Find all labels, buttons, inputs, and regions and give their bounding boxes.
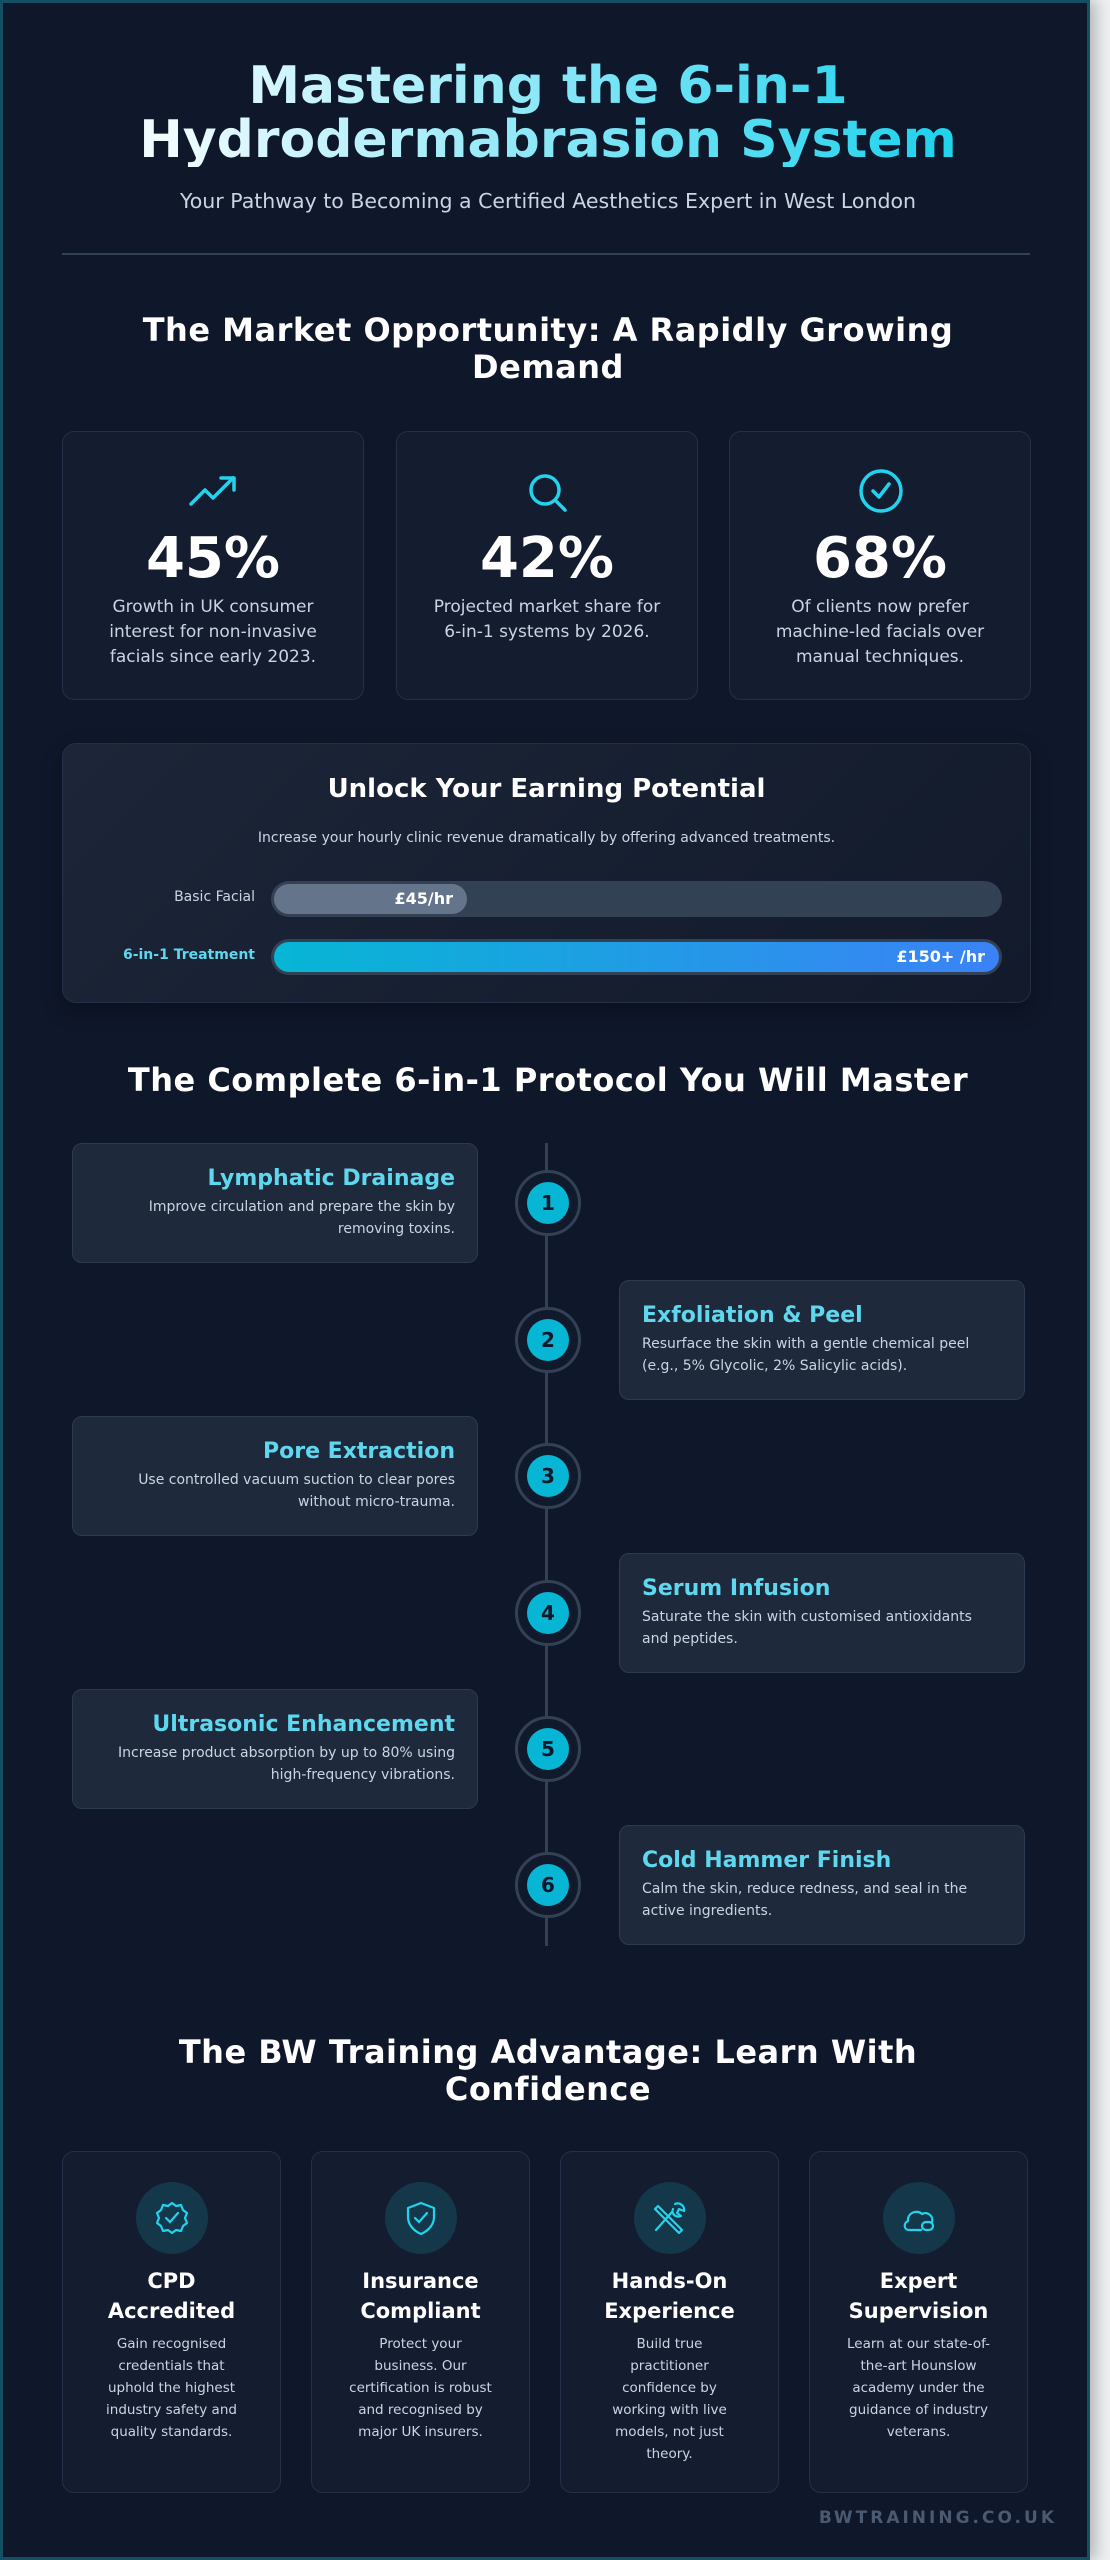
card: insurance: Compliant [360,2299,481,2323]
step 6 node: 6 [541,1873,555,1897]
title: Hydrodermabrasion System [139,110,957,170]
card: CPD: uphold the highest [108,2380,235,2396]
step 1 node [515,1170,581,1236]
step 1 card [72,1143,478,1263]
title [3,59,1093,167]
card: insurance: major UK insurers. [358,2424,483,2440]
bar: 6-in-1 treatment: £150+ /hr [896,947,985,966]
title: Mastering the 6-in-1 [248,56,848,116]
icon: badge [136,2182,208,2254]
card: CPD: Accredited [108,2299,235,2323]
card: supervision: guidance of industry [849,2402,988,2418]
panel: stat 42% [396,431,698,700]
step 4 card [619,1553,1025,1673]
card: insurance: business. Our [374,2358,467,2374]
step 5 node: 5 [541,1737,555,1761]
card: supervision: the-art Hounslow [860,2358,977,2374]
card: CPD: industry safety and [106,2402,237,2418]
step 4 card: Serum Infusion [642,1576,830,1601]
number: 42% [480,526,614,591]
step 6 card [619,1825,1025,1945]
card: insurance: and recognised by [358,2402,483,2418]
heading: Unlock Your Earning Potential [328,774,765,804]
number: 45% [146,526,280,591]
step 5 card [72,1689,478,1809]
card: supervision: veterans. [887,2424,950,2440]
card: hands-on: Build true [637,2336,702,2352]
footer: BWTRAINING.CO.UK [819,2508,1057,2528]
card: CPD: quality standards. [111,2424,232,2440]
bar: 6-in-1 treatment: 6-in-1 Treatment [123,947,255,963]
step 6 card: Calm the skin, reduce redness, and seal in the active ingredients. [642,1881,967,1919]
step 5 node [515,1716,581,1782]
card: insurance: certification is robust [349,2380,492,2396]
step 6 node [515,1852,581,1918]
icon: shield [385,2182,457,2254]
bar: basic facial: £45/hr [394,889,453,908]
heading: market opportunity [142,311,953,386]
step 2 card: Exfoliation & Peel [642,1303,863,1328]
number: 68% [813,526,947,591]
card: hands-on: practitioner [630,2358,709,2374]
panel: earning potential [62,743,1031,1003]
heading: BW advantage [179,2033,917,2108]
step 4 card: Saturate the skin with customised antioxidants and peptides. [642,1609,972,1647]
step 3 card: Use controlled vacuum suction to clear pores without micro-trauma. [138,1472,455,1510]
icon: check circle [859,469,903,513]
card: insurance [311,2151,530,2493]
step 3 node [515,1443,581,1509]
card: supervision: Supervision [849,2299,988,2323]
panel: stat 45% [62,431,364,700]
step 2 card [619,1280,1025,1400]
bar: 6-in-1 treatment [123,939,1002,975]
card: hands-on [560,2151,779,2493]
card: supervision: academy under the [852,2380,985,2396]
step 3 card [72,1416,478,1536]
card: CPD: CPD [147,2269,196,2293]
step 4 node: 4 [541,1601,555,1625]
step 4 node [515,1580,581,1646]
card: CPD: credentials that [118,2358,225,2374]
card: insurance: Protect your [379,2336,462,2352]
heading: market opportunity: Demand [472,348,624,386]
step 1 node: 1 [541,1191,555,1215]
heading: protocol: The Complete 6-in-1 Protocol You Will Master [128,1061,968,1099]
step 5 card: Ultrasonic Enhancement [152,1712,455,1737]
icon: search [529,474,567,512]
panel: stat 68% [729,431,1031,700]
card: CPD: Gain recognised [117,2336,226,2352]
description: Projected market share for [434,597,660,617]
card: hands-on: working with live [612,2402,727,2418]
icon: tools [634,2182,706,2254]
card: insurance: Insurance [362,2269,479,2293]
step 1 card: Lymphatic Drainage [208,1166,455,1191]
card: hands-on: Experience [604,2299,735,2323]
description [434,597,660,642]
card: CPD [62,2151,281,2493]
step 3 card: Pore Extraction [263,1439,455,1464]
step 5 card: Increase product absorption by up to 80% using high-frequency vibrations. [118,1745,455,1783]
card: hands-on: confidence by [622,2380,717,2396]
step 1 card: Improve circulation and prepare the skin by removing toxins. [149,1199,455,1237]
bar: basic facial [174,881,1002,917]
card: hands-on: Hands-On [612,2269,727,2293]
bar: basic facial: Basic Facial [174,889,255,905]
icon: cloud [883,2182,955,2254]
step 3 node: 3 [541,1464,555,1488]
card: supervision: Expert [880,2269,957,2293]
description: 6-in-1 systems by 2026. [444,622,650,642]
card: supervision: Learn at our state-of- [847,2336,990,2352]
description: Of clients now prefer machine-led facials over manual techniques. [776,597,984,667]
heading: BW advantage: The BW Training Advantage: Learn With [179,2033,917,2071]
timeline line [545,1143,548,1946]
card: hands-on: models, not just [615,2424,724,2440]
subtitle: Your Pathway to Becoming a Certified Aesthetics Expert in West London [180,189,916,213]
heading: BW advantage: Confidence [445,2070,651,2108]
step 2 card: Resurface the skin with a gentle chemical peel (e.g., 5% Glycolic, 2% Salicylic acids). [642,1336,969,1374]
subtitle: Increase your hourly clinic revenue dramatically by offering advanced treatments. [258,830,835,846]
card: supervision [809,2151,1028,2493]
description: Growth in UK consumer interest for non-invasive facials since early 2023. [109,597,317,667]
icon: trend [189,476,236,506]
heading: market opportunity: The Market Opportunity: A Rapidly Growing [143,311,953,349]
step 2 node: 2 [541,1328,555,1352]
step 6 card: Cold Hammer Finish [642,1848,891,1873]
step 2 node [515,1307,581,1373]
card: hands-on: theory. [646,2446,693,2462]
